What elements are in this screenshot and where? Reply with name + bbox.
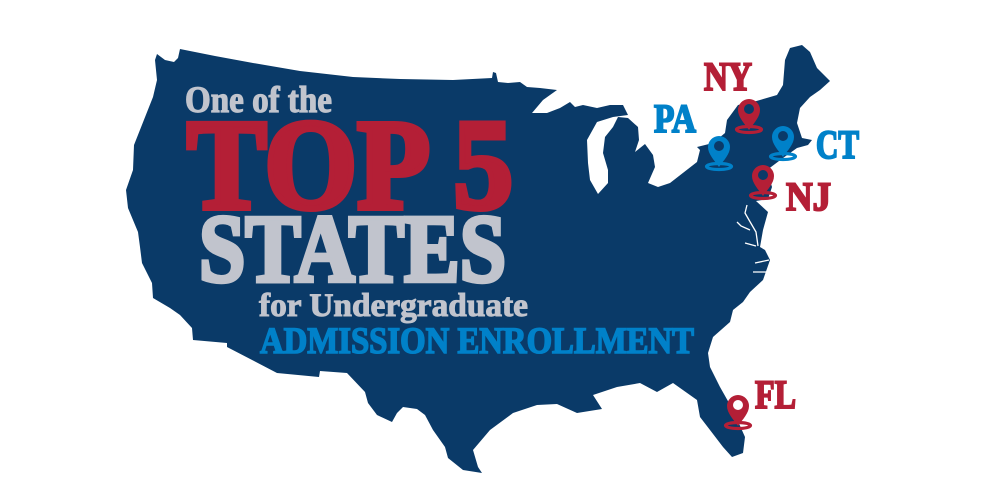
label: NY: NY	[704, 54, 752, 99]
map: contiguous United States	[126, 45, 830, 473]
heading: STATES: STATES	[199, 195, 506, 302]
label: PA: PA	[654, 96, 696, 141]
heading: TOP 5: TOP 5	[187, 94, 513, 236]
icon: FL pin	[726, 395, 750, 428]
text: One of the: One of the	[185, 80, 332, 121]
label: FL: FL	[755, 372, 796, 417]
icon: PA pin	[706, 136, 732, 170]
text: Admission Enrollment: ADMISSION ENROLLMENT	[260, 321, 694, 362]
label: CT: CT	[816, 122, 859, 167]
icon: NJ pin	[750, 165, 776, 198]
text: for Undergraduate: for Undergraduate	[259, 288, 528, 324]
icon: CT pin	[770, 126, 796, 160]
label: NJ: NJ	[786, 174, 831, 219]
icon: NY pin	[736, 99, 762, 132]
